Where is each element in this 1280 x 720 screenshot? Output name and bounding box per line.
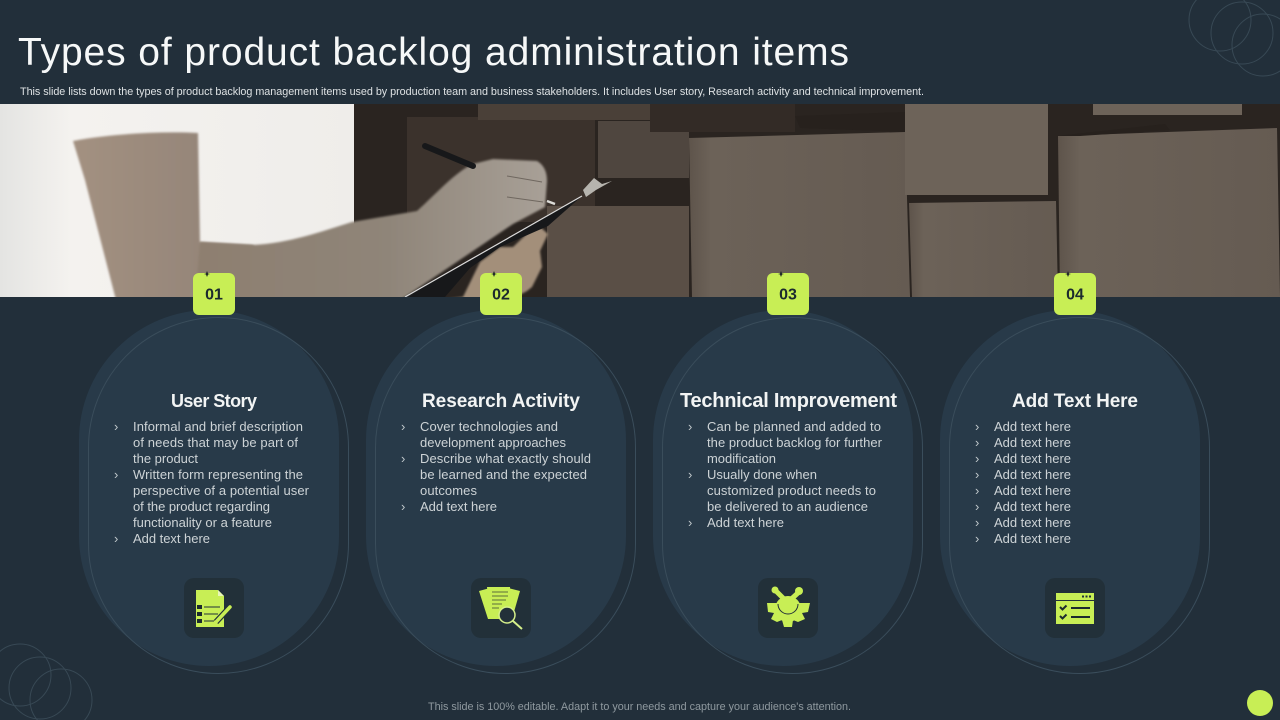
bullet list: Technical Improvement [688, 419, 883, 530]
bullet list: Add Text Here: › [975, 451, 979, 466]
bullet list: User Story: Add text here [133, 531, 210, 546]
panel 3: Technical Improvement [653, 271, 922, 674]
bullet list: Technical Improvement: be delivered to an audience [707, 499, 868, 514]
bullet list: User Story: › [114, 419, 118, 434]
bullet list: Technical Improvement: Usually done when [707, 467, 817, 482]
bullet list: Research Activity [401, 419, 591, 514]
bullet list: Research Activity: Add text here [420, 499, 497, 514]
badge 01: 01 [205, 286, 223, 304]
page marker circle [1247, 690, 1273, 716]
badge 04 [1054, 271, 1096, 315]
panel 2: Research Activity [366, 271, 636, 674]
decorative circles: top right [1189, 0, 1280, 76]
bullet list: Research Activity: › [401, 499, 405, 514]
bullet list: User Story: of needs that may be part of [133, 435, 298, 450]
badge 04: 04 [1066, 286, 1084, 304]
bullet list: User Story: Informal and brief description [133, 419, 303, 434]
title: Types of product backlog administration items [18, 31, 849, 74]
bullet list: Add Text Here: › [975, 419, 979, 434]
badge 03 [767, 271, 809, 315]
bullet list: Research Activity: › [401, 419, 405, 434]
subtitle: This slide lists down the types of product backlog management items used by production team and business stakeholders. It includes User story, Research activity and technical improvement. [20, 86, 924, 98]
bullet list: Research Activity: be learned and the expected [420, 467, 587, 482]
bullet list: User Story: functionality or a feature [133, 515, 272, 530]
icon: papers with magnifying glass [471, 578, 531, 638]
badge 03: 03 [779, 286, 797, 304]
bullet list: User Story: › [114, 467, 118, 482]
bullet list: Technical Improvement: › [688, 467, 692, 482]
bullet list: Technical Improvement: › [688, 419, 692, 434]
bullet list: Technical Improvement: Can be planned and added to [707, 419, 881, 434]
bullet list: Research Activity: Describe what exactly should [420, 451, 591, 466]
icon: document with checklist and pencil [184, 578, 244, 638]
bullet list: Add Text Here: Add text here [994, 483, 1071, 498]
badge 01 [193, 271, 235, 315]
footer note: This slide is 100% editable. Adapt it to your needs and capture your audience's attention. [428, 701, 851, 713]
decorative circles: bottom left [0, 644, 92, 720]
bullet list: Technical Improvement: customized product needs to [707, 483, 876, 498]
bullet list: Add Text Here: Add text here [994, 515, 1071, 530]
panel 1: User Story [79, 271, 348, 674]
heading: Technical Improvement: Technical Improvement [680, 390, 897, 412]
bullet list: Add Text Here: › [975, 467, 979, 482]
heading: Research Activity: Research Activity [422, 391, 580, 412]
bullet list: User Story [114, 419, 310, 546]
bullet list: Add Text Here: Add text here [994, 435, 1071, 450]
bullet list: Add Text Here: › [975, 435, 979, 450]
bullet list: Add Text Here: › [975, 499, 979, 514]
bullet list: Research Activity: › [401, 451, 405, 466]
bullet list: User Story: perspective of a potential user [133, 483, 310, 498]
bullet list: Add Text Here: Add text here [994, 499, 1071, 514]
bullet list: Add Text Here: Add text here [994, 419, 1071, 434]
bullet list: Add Text Here: Add text here [994, 531, 1071, 546]
bullet list: Add Text Here [975, 419, 1071, 546]
bullet list: Add Text Here: Add text here [994, 451, 1071, 466]
bullet list: Add Text Here: › [975, 515, 979, 530]
bullet list: Technical Improvement: the product backlog for further [707, 435, 883, 450]
bullet list: User Story: of the product regarding [133, 499, 270, 514]
bullet list: Research Activity: Cover technologies and [420, 419, 558, 434]
icon: gear with wrench and screwdriver [758, 578, 818, 638]
bullet list: Research Activity: outcomes [420, 483, 478, 498]
bullet list: User Story: › [114, 531, 118, 546]
badge 02 [480, 271, 522, 315]
heading: User Story: User Story [171, 391, 257, 411]
bullet list: Technical Improvement: modification [707, 451, 776, 466]
bullet list: Add Text Here: Add text here [994, 467, 1071, 482]
bullet list: Technical Improvement: › [688, 515, 692, 530]
icon: checklist window [1045, 578, 1105, 638]
badge 02: 02 [492, 286, 510, 304]
bullet list: Add Text Here: › [975, 531, 979, 546]
photo: arm writing on clipboard in front of cardboard boxes [0, 104, 1280, 300]
bullet list: User Story: the product [133, 451, 198, 466]
bullet list: Technical Improvement: Add text here [707, 515, 784, 530]
panel 4: Add Text Here [940, 271, 1210, 674]
bullet list: Add Text Here: › [975, 483, 979, 498]
bullet list: User Story: Written form representing the [133, 467, 303, 482]
bullet list: Research Activity: development approaches [420, 435, 566, 450]
heading: Add Text Here: Add Text Here [1012, 391, 1138, 412]
